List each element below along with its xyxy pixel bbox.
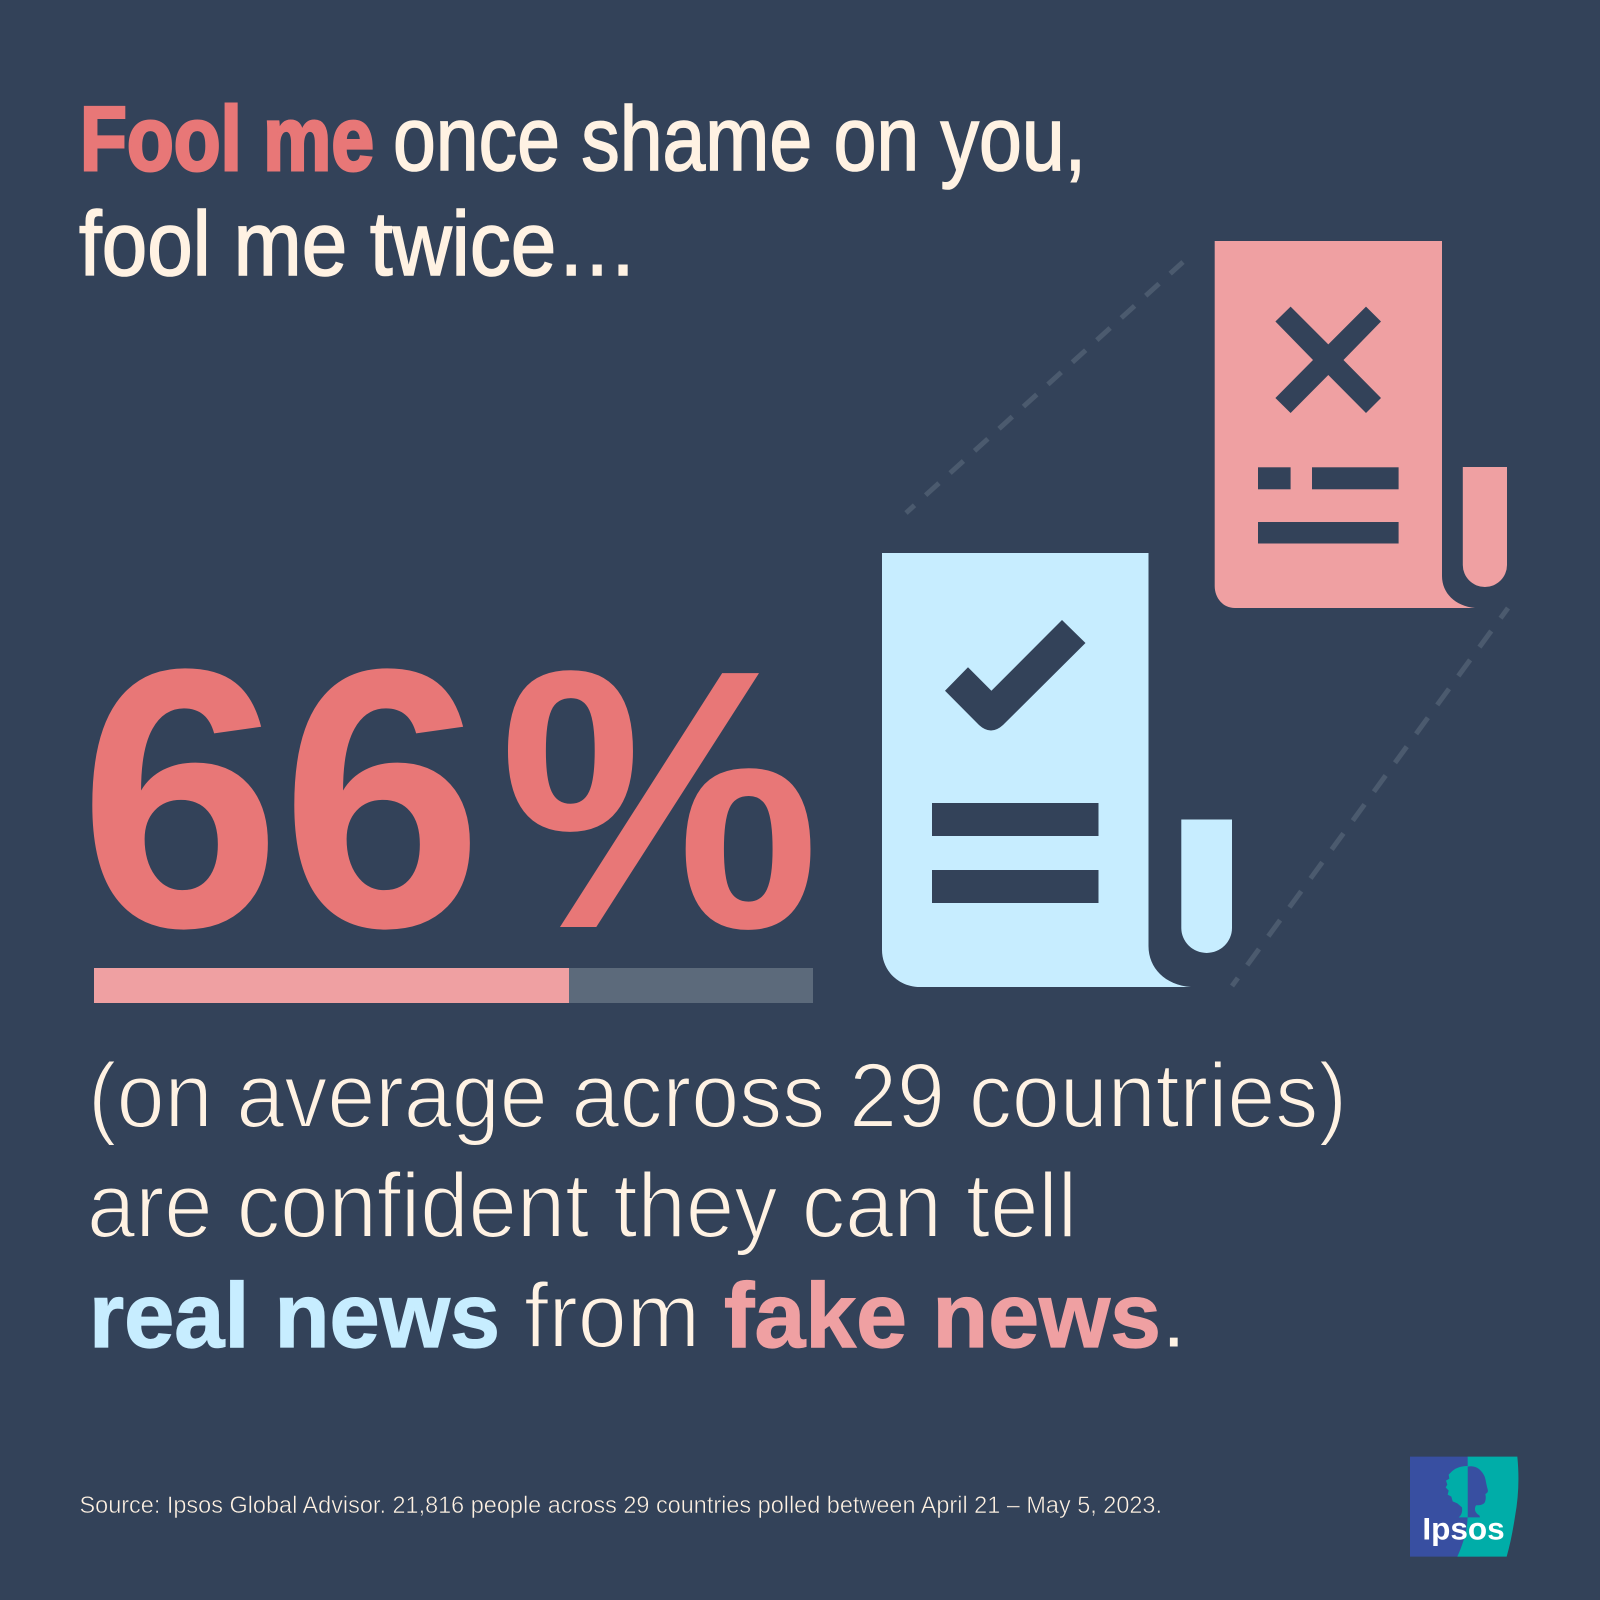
title <box>79 89 1086 295</box>
logo: Ipsos: Ipsos <box>1422 1511 1505 1546</box>
title: second line: fool me twice… <box>79 194 638 295</box>
description: full stop: . <box>1161 1265 1187 1367</box>
progress bar: 66 percent <box>94 968 813 1003</box>
description: fake news: fake news <box>724 1265 1161 1367</box>
description line 1: (on average across 29 countries) <box>88 1045 1347 1147</box>
source note: Source: Ipsos Global Advisor. 21,816 people across 29 countries polled between April 21 – May 5, 2023. <box>80 1492 1162 1519</box>
dashed connector lines <box>906 262 1508 986</box>
big statistic digits: 66 <box>79 593 483 1005</box>
logo: Ipsos <box>1410 1457 1518 1557</box>
description: from: from <box>524 1265 700 1367</box>
description: real news: real news <box>89 1265 500 1367</box>
big statistic: 66% <box>79 593 820 1006</box>
title: rest of first line: once shame on you, <box>393 89 1086 190</box>
description text <box>87 1045 1347 1367</box>
title: highlighted words: Fool me <box>80 89 374 190</box>
icon: fake news document <box>1215 241 1507 608</box>
icon: real news document <box>882 553 1232 987</box>
big statistic percent sign: % <box>499 594 820 1006</box>
description line 2: are confident they can tell <box>87 1155 1077 1257</box>
